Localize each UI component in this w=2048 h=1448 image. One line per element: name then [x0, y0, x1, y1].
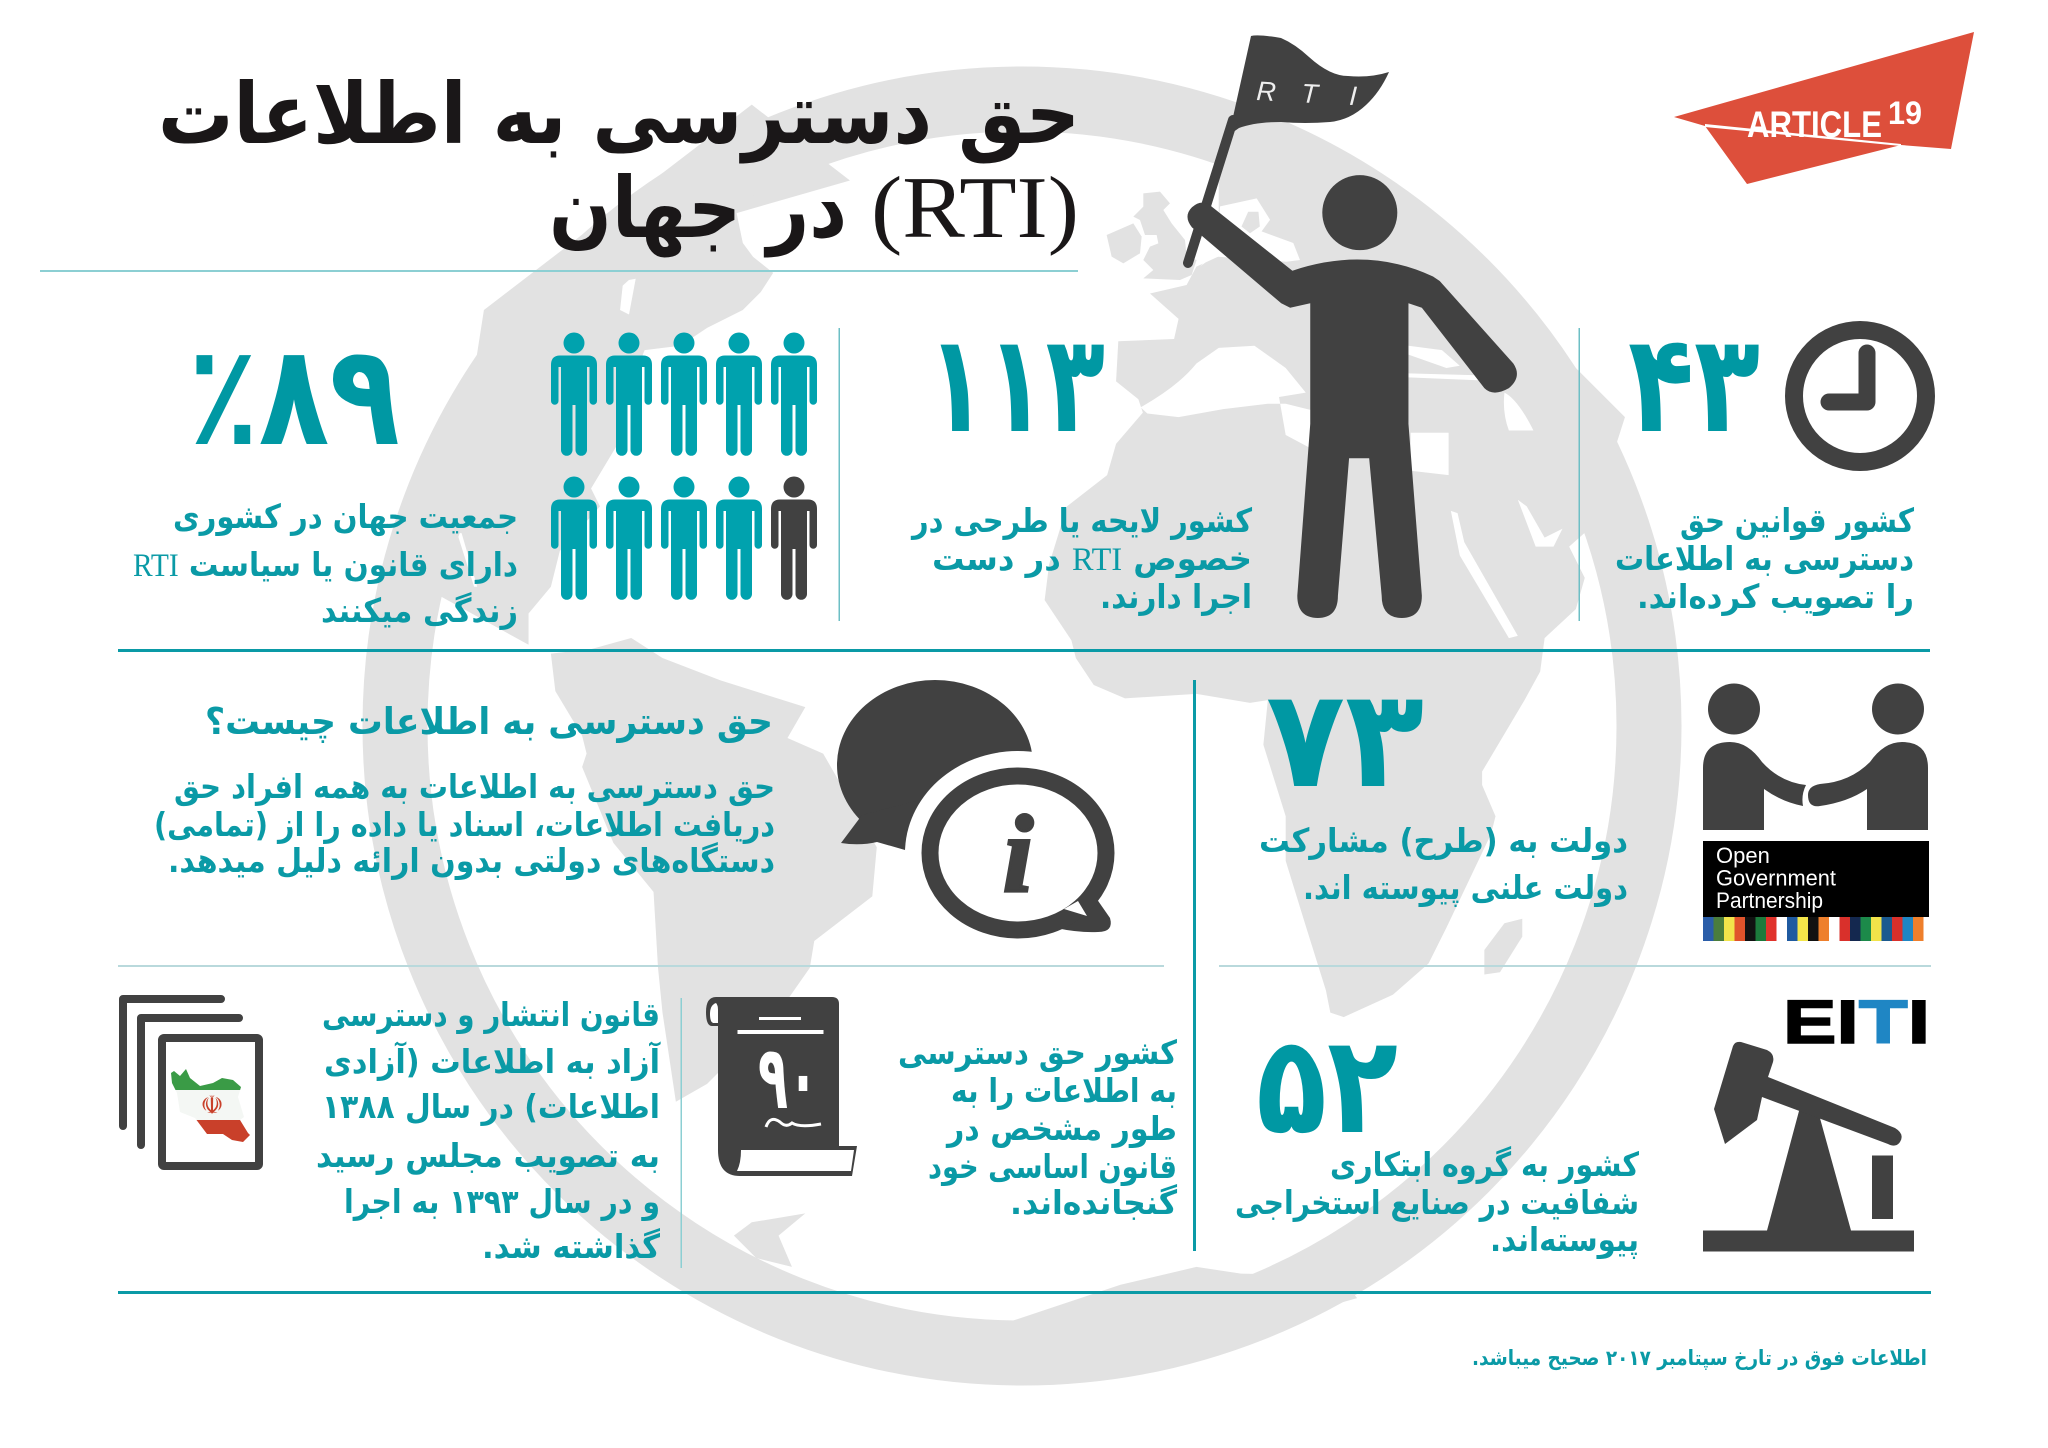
text: 43 description: کشور قوانین حق	[1680, 501, 1915, 541]
icon: scroll with 90	[706, 997, 857, 1176]
text: 89 description	[133, 497, 518, 630]
number 89%: ٪۸۹	[188, 315, 400, 478]
icon: stacked frames with Iran map: ☫	[200, 1091, 224, 1121]
text: Iran law: به تصویب مجلس رسید	[316, 1136, 660, 1176]
text: 73 description: دولت علنی پیوسته اند.	[1303, 868, 1628, 908]
text: Iran law: گذاشته شد.	[482, 1227, 661, 1266]
title	[158, 65, 1080, 258]
icon: speech bubbles with i	[837, 680, 1131, 955]
icon: oil pump	[1703, 1042, 1914, 1252]
text: 89 description: جمعیت جهان در کشوری	[173, 497, 518, 537]
text: 90 description: کشور حق دسترسی	[898, 1033, 1178, 1073]
text: 113 description	[910, 501, 1253, 617]
pictogram: ten people	[551, 332, 817, 600]
paragraph: دریافت اطلاعات، اسناد یا داده را از (تمامی)	[154, 805, 775, 844]
text: 90 description: به اطلاعات را به	[951, 1071, 1177, 1110]
text: 52 description: پیوسته‌اند.	[1490, 1220, 1639, 1260]
text: Iran law	[316, 995, 661, 1266]
number 43: ۴۳	[1628, 306, 1760, 464]
title: (RTI)	[871, 160, 1079, 257]
text: Iran law: اطلاعات) در سال ۱۳۸۸	[322, 1087, 660, 1126]
number 73: ۷۳	[1266, 661, 1424, 819]
text: 73 description: دولت به (طرح) مشارکت	[1259, 821, 1628, 861]
stat: 43 countries	[1615, 306, 1926, 617]
logo: ARTICLE 19	[1674, 32, 1974, 184]
number 52: ۵۲	[1256, 1007, 1398, 1165]
text: 43 description	[1615, 501, 1915, 617]
icon: clock	[1794, 330, 1926, 462]
background globe	[395, 99, 1649, 1361]
text: 113 description: اجرا دارند.	[1100, 577, 1252, 617]
panel: Iran law	[123, 995, 661, 1266]
text: 113 description: خصوص RTI در دست	[932, 539, 1252, 579]
title: در جهان	[549, 159, 847, 258]
flag lettering: RTI	[1256, 76, 1358, 111]
logo: Open Government Partnership	[1703, 841, 1929, 941]
stat: 73 governments	[1259, 661, 1929, 941]
text: 90 description: طور مشخص در	[945, 1109, 1177, 1149]
heading: حق دسترسی به اطلاعات چیست؟	[205, 700, 773, 743]
text: 43 description: را تصویب کرده‌اند.	[1637, 577, 1914, 617]
paragraph: حق دسترسی به اطلاعات به همه افراد حق	[174, 767, 775, 807]
text: 73 description	[1259, 821, 1628, 908]
logo: Open Government Partnership: Government	[1716, 866, 1836, 890]
logo: EITI: EI TI	[1783, 988, 1930, 1056]
panel: what is RTI	[154, 680, 1131, 955]
text: 43 description: دسترسی به اطلاعات	[1615, 539, 1914, 579]
icon: man holding RTI flag	[1187, 35, 1517, 618]
text: 89 description: دارای قانون یا سیاست RTI	[133, 545, 518, 585]
text: 52 description: کشور به گروه ابتکاری	[1330, 1145, 1640, 1185]
text: 89 description: زندگی میکنند	[321, 591, 518, 630]
logo: ARTICLE 19: ARTICLE	[1747, 104, 1882, 145]
text: 90 description: قانون اساسی خود	[928, 1147, 1177, 1187]
text: Iran law: و در سال ۱۳۹۳ به اجرا	[344, 1182, 660, 1222]
logo: Open Government Partnership: Partnership	[1716, 888, 1823, 913]
title: حق دسترسی به اطلاعات	[158, 65, 1080, 164]
stat: 52 countries EITI	[1235, 988, 1930, 1260]
icon: stacked frames with Iran map	[123, 999, 259, 1166]
text: 90 description	[898, 1033, 1178, 1222]
paragraph	[154, 767, 775, 881]
text: 52 description	[1235, 1145, 1640, 1260]
logo: Open Government Partnership: Open	[1716, 843, 1770, 868]
icon: speech bubbles with i: i	[1003, 793, 1034, 915]
footnote: اطلاعات فوق در تارخ سپتامبر ۲۰۱۷ صحیح میباشد.	[1472, 1346, 1927, 1370]
icon: scroll with 90: ۹۰	[758, 1026, 818, 1129]
text: Iran law: قانون انتشار و دسترسی	[322, 995, 660, 1035]
text: Iran law: آزاد به اطلاعات (آزادی	[324, 1041, 661, 1081]
number 113: ۱۱۳	[927, 306, 1105, 464]
stat: 113 countries	[910, 306, 1253, 617]
paragraph: دستگاه‌های دولتی بدون ارائه دلیل میدهد.	[168, 841, 775, 881]
stat: 89 percent population	[133, 315, 817, 630]
icon: handshake	[1703, 684, 1928, 830]
text: 113 description: کشور لایحه یا طرحی در	[910, 501, 1253, 541]
logo: ARTICLE 19: 19	[1888, 95, 1922, 131]
panel: 90 constitutions	[706, 997, 1178, 1222]
text: 90 description: گنجانده‌اند.	[1010, 1183, 1178, 1222]
text: 52 description: شفافیت در صنایع استخراجی	[1235, 1183, 1639, 1223]
